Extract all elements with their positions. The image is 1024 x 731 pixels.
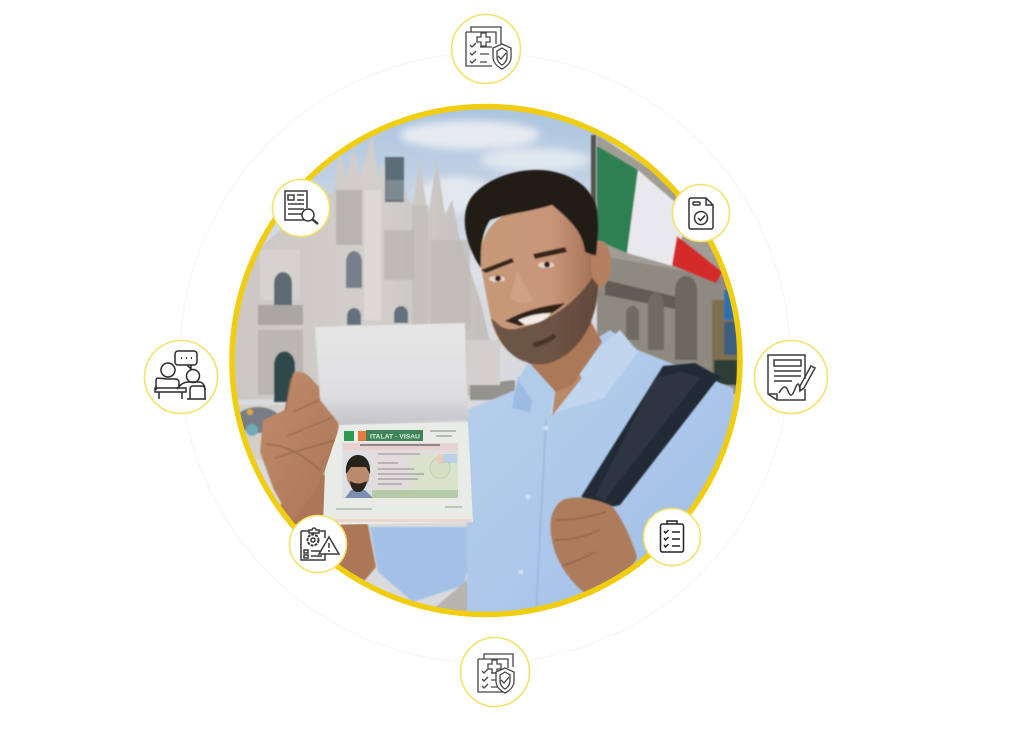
hand on strap [550,498,637,593]
icon: document magnifier [272,180,330,236]
infographic: circular visa diagram [144,14,828,708]
right building [597,135,745,395]
yellow ring [232,106,740,614]
backpack strap [581,363,722,508]
head [465,170,611,364]
icon: signed contract [754,340,828,414]
visa heading: ITALAT · VISAU [370,434,420,440]
icon: medical checklist with shield (bottom) [460,638,530,706]
sky [273,109,616,279]
icon: consultation at desk [144,340,218,414]
icon: clipboard checklist [644,508,700,566]
icon: clipboard with gear and warning [290,516,346,572]
main circular photo [229,103,745,625]
cathedral [229,136,515,460]
visa portrait [345,455,373,498]
hair [465,170,598,268]
raised hand and forearm [260,372,376,592]
neck [525,320,602,392]
passport visa page [323,422,473,525]
faint outer orbit ring [180,53,790,663]
passport top page [315,323,468,425]
beard [491,278,598,364]
icon: medical checklist with shield (top) [452,14,520,84]
eyebrows [481,258,514,273]
shirt and torso [370,330,745,625]
italian flag [591,135,722,283]
collar [512,376,532,412]
eyes [489,276,505,282]
icon: document with check [672,184,730,242]
